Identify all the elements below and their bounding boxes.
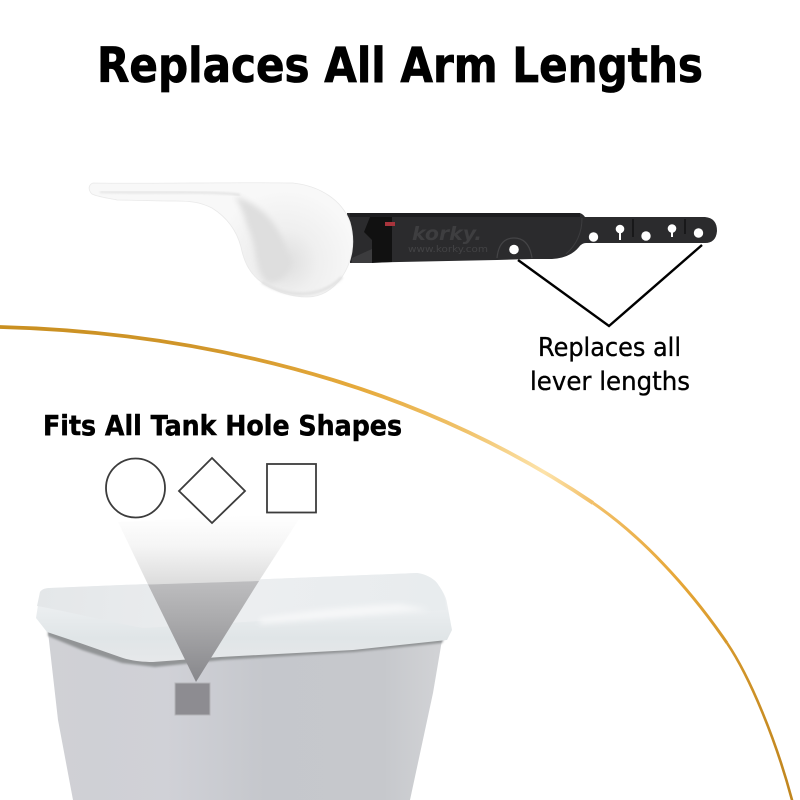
shape icons <box>106 458 316 523</box>
lever illustration <box>89 183 717 297</box>
gold arc <box>0 327 796 800</box>
icon: square <box>267 464 316 512</box>
subheading: Fits All Tank Hole Shapes <box>43 409 402 442</box>
lid shadow <box>48 630 444 667</box>
arm holes <box>509 224 703 254</box>
icon: diamond <box>179 458 245 523</box>
callout label: Replaces all <box>538 333 681 363</box>
callout label <box>530 333 690 397</box>
tank body <box>48 632 442 800</box>
title: Replaces All Arm Lengths <box>97 38 703 94</box>
red tab <box>385 222 395 226</box>
korky url: www.korky.com <box>408 245 488 255</box>
hole plate <box>175 683 210 715</box>
icon: circle <box>106 458 165 518</box>
korky logo: korky. <box>412 223 482 245</box>
lever handle <box>89 183 353 297</box>
callout label: lever lengths <box>530 367 690 397</box>
lever arm <box>347 213 717 263</box>
callout lines <box>518 245 702 326</box>
toilet tank <box>36 573 452 800</box>
projection beam <box>118 513 303 682</box>
tank lid <box>36 573 452 662</box>
